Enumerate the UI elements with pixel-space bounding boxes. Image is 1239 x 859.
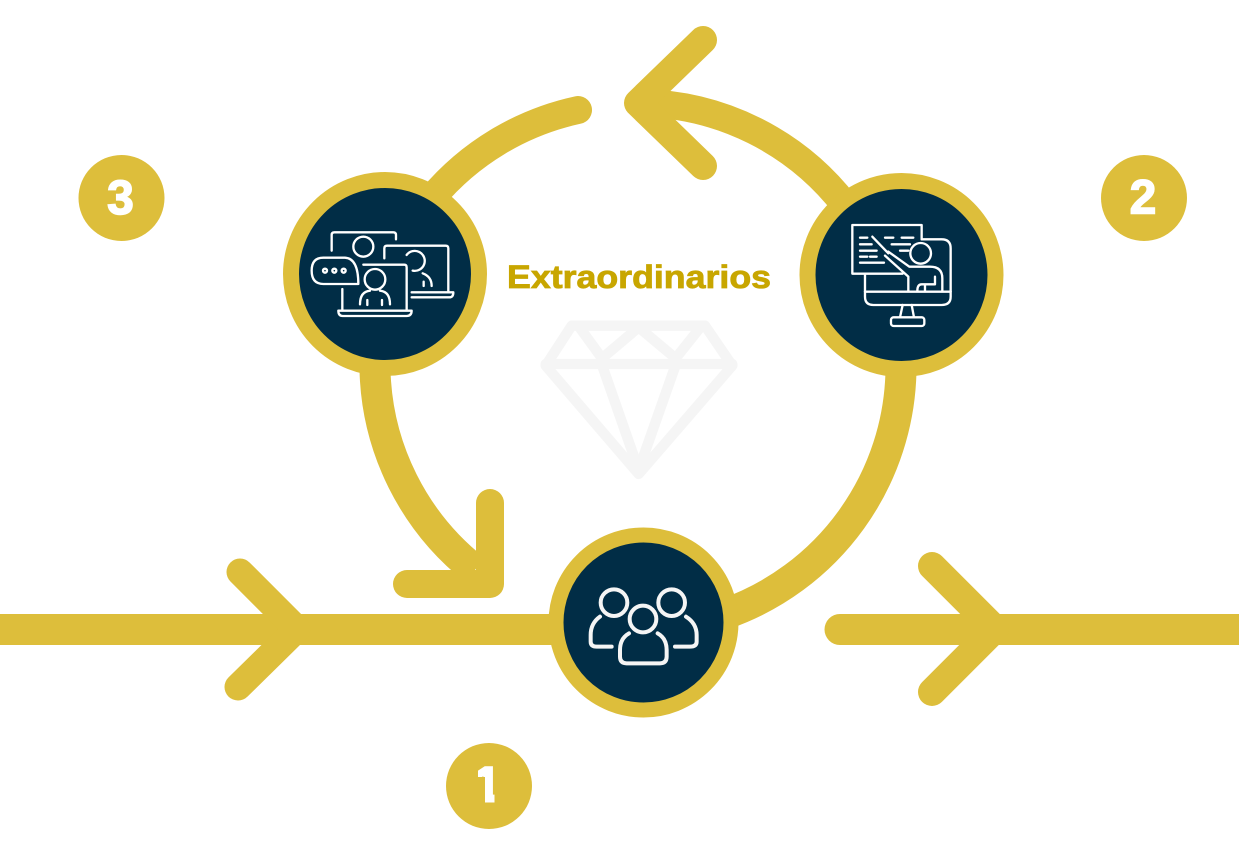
arrowhead: top xyxy=(638,40,703,166)
diamond watermark xyxy=(546,326,732,474)
node 2: online teacher xyxy=(808,181,996,369)
badge 3: 3 xyxy=(107,172,134,225)
arc: node 2 to top arrow xyxy=(640,103,845,205)
badge 2 xyxy=(1101,155,1187,241)
outgoing line xyxy=(840,614,1239,645)
badge 2: 2 xyxy=(1130,172,1156,224)
badge 1 xyxy=(446,743,532,829)
icon: online teacher xyxy=(852,225,951,326)
arc: node 3 to arrow xyxy=(375,370,475,570)
incoming line xyxy=(0,614,560,645)
node 3: video conference xyxy=(291,180,479,368)
arrowhead: left loop xyxy=(407,503,490,584)
arc: top to node 3 xyxy=(432,110,578,198)
arc: node 2 to node 1 xyxy=(725,370,901,614)
title: Extraordinarios xyxy=(507,259,771,295)
icon: group of people xyxy=(591,589,697,663)
icon: video conference xyxy=(312,232,453,316)
node 1: group xyxy=(556,535,731,710)
arrowhead: incoming xyxy=(238,572,297,687)
badge 3 xyxy=(78,155,164,241)
badge 1: 1 xyxy=(474,759,500,812)
arrowhead: outgoing xyxy=(932,566,995,692)
